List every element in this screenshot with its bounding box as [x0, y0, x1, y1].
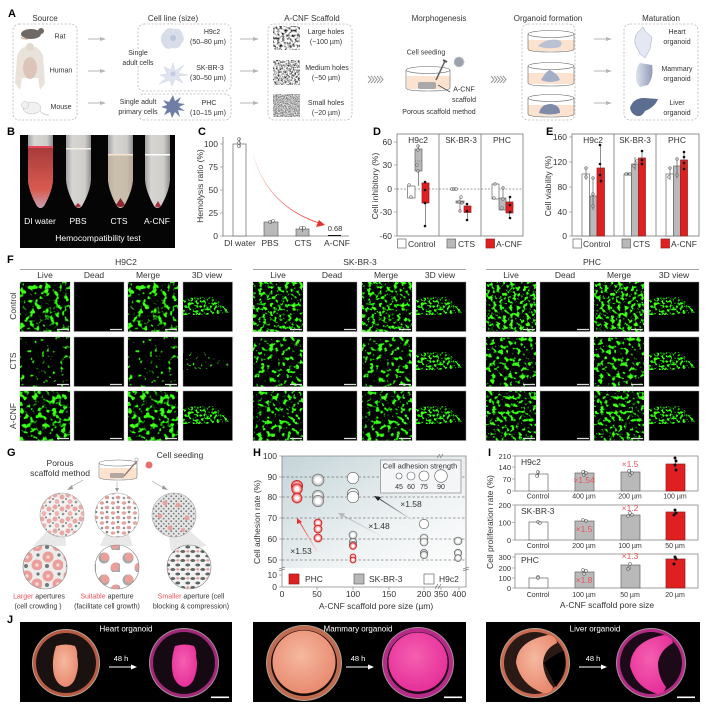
arrows cell line to scaffold: [240, 37, 259, 105]
scaffold box with holes blocks: (~50 µm): [312, 75, 340, 82]
G labels: Porous: [47, 458, 73, 468]
panel D: cell inhibitory box plot: [370, 134, 523, 249]
panel E: cell viability bar chart: 120: [553, 157, 567, 167]
x labels: A-CNF: [324, 238, 350, 248]
scaffold box with holes blocks: [268, 24, 352, 120]
column headers: Dead: [322, 270, 342, 280]
3D view green slabs: [183, 297, 698, 424]
panel C: hemolysis bar chart: [195, 137, 350, 248]
red bubbles PHC: [291, 480, 356, 563]
morphogenesis dish: Porous scaffold method: [402, 109, 476, 116]
legend: [573, 239, 697, 249]
chart: H9c2: 70: [503, 475, 511, 484]
legend: CTS: [633, 239, 650, 249]
column headers: Merge: [374, 270, 398, 280]
column headers: Dead: [84, 270, 104, 280]
tube: DI water: [28, 135, 53, 208]
x ticks labels: 100: [346, 589, 360, 599]
aperture captions: blocking & compression): [153, 604, 229, 610]
x labels: CTS: [294, 238, 312, 248]
column headings: Morphogenesis: [412, 14, 466, 23]
axis titles: [252, 480, 433, 611]
x ticks labels: 350: [434, 589, 448, 599]
cell line labels: [190, 29, 226, 117]
down arrows: [67, 480, 168, 492]
bubble legend: PHC: [305, 574, 323, 584]
pink cell spots in the dense scaffold: [158, 500, 190, 532]
group titles: SK-BR-3: [445, 136, 477, 145]
arrows source to cell line: [88, 37, 106, 105]
chart: SK-BR-3: [498, 501, 698, 550]
black arrow: [374, 496, 412, 520]
axis titles: A-CNF scaffold pore size (µm): [319, 601, 433, 611]
chart: H9c2: 0: [507, 487, 511, 496]
row labels: CTS: [8, 352, 18, 370]
seeding dish: [99, 458, 152, 480]
column headers: [37, 270, 690, 280]
group titles: H9c2: [583, 135, 603, 145]
axis breaks: [279, 454, 469, 589]
tube labels: PBS: [69, 216, 87, 226]
bubble legend: [289, 574, 459, 584]
chart: H9c2: [498, 452, 698, 500]
chart: H9c2: Control: [527, 494, 550, 500]
morphogenesis dish: A-CNF: [453, 86, 475, 94]
chart: PHC: ×1.8: [576, 575, 593, 585]
red arrow: [297, 518, 318, 553]
panel D: cell inhibitory box plot: 60: [383, 137, 392, 147]
column headers: 3D view: [659, 270, 690, 280]
group titles: SK-BR-3: [619, 136, 651, 145]
chart: SK-BR-3: 100: [498, 518, 511, 528]
icon: PHC cell: [161, 95, 185, 118]
cell line box: Single adult: [120, 99, 156, 106]
panel C: hemolysis bar chart: 50: [209, 185, 218, 195]
x ticks labels: 0: [280, 589, 285, 599]
panel D: cell inhibitory box plot: -60: [380, 231, 392, 241]
multipliers: [290, 499, 422, 556]
scaffold box with holes blocks: Large holes: [308, 29, 345, 36]
panel A: workflow schematic: [8, 8, 698, 120]
adhesion strength legend: 90: [437, 484, 445, 491]
column headers: Dead: [555, 270, 575, 280]
panel E: cell viability bar chart: 80: [558, 182, 567, 192]
panel E: cell viability bar chart: [543, 132, 699, 249]
chart: PHC: 300: [498, 553, 511, 562]
multipliers: ×1.53: [290, 546, 312, 556]
source dashed box: Mouse: [50, 104, 72, 111]
source dashed box: [13, 24, 77, 120]
panel label A: A: [8, 8, 16, 20]
aperture circles zoomed: [23, 545, 211, 589]
panel E: cell viability bar chart: 0: [562, 231, 567, 241]
row labels: Control: [8, 292, 18, 320]
tube labels: A-CNF: [144, 216, 170, 226]
column headings: Source: [32, 14, 58, 23]
chevrons 2: [491, 76, 506, 83]
multipliers: ×1.48: [368, 521, 390, 531]
chart: H9c2: 400 µm: [572, 494, 596, 500]
panel label D: D: [373, 126, 381, 138]
legend: [398, 239, 522, 249]
panel C: hemolysis bar chart: 100: [204, 139, 218, 149]
x ticks labels: 400: [452, 589, 466, 599]
G labels: [30, 450, 204, 478]
box groups: [408, 145, 513, 227]
column headings: Cell line (size): [148, 14, 198, 23]
cell line box: adult cells: [122, 60, 154, 67]
panel H: adhesion bubble chart: [252, 451, 469, 611]
tube labels: Hemocompatibility test: [55, 233, 141, 243]
chart: H9c2: 140: [498, 463, 511, 472]
group headers: [20, 257, 699, 270]
chart: PHC: PHC: [521, 555, 539, 565]
chart: SK-BR-3: SK-BR-3: [521, 506, 555, 516]
group headers: PHC: [583, 257, 601, 267]
y title: Cell proliferation rate (%): [485, 475, 495, 569]
red trend arrow: [252, 150, 325, 227]
aperture captions: (cell crowding ): [14, 604, 62, 610]
G labels: scaffold method: [30, 468, 90, 478]
organoid formation box with dishes: [522, 24, 575, 120]
maturation box: Heart: [668, 29, 686, 36]
chart: H9c2: 210: [498, 452, 511, 461]
column headers: Live: [37, 270, 53, 280]
bubble legend: H9c2: [439, 574, 459, 584]
maturation box: organoid: [663, 76, 691, 83]
icon: SK-BR-3 cell: [159, 63, 188, 86]
chart: H9c2: H9c2: [521, 457, 541, 467]
photo: mammary organoid: 48 h: [351, 654, 365, 663]
aperture captions: Suitable aperture: [80, 594, 134, 600]
cell line labels: PHC: [202, 100, 216, 107]
gray arrow: [338, 513, 385, 538]
chart: SK-BR-3: 100 µm: [618, 543, 642, 550]
y ticks labels: 70: [268, 513, 277, 523]
adhesion strength legend: 60: [407, 484, 415, 491]
tube labels: CTS: [110, 216, 128, 226]
cell line labels: (50–80 µm): [190, 39, 226, 46]
panel label J: J: [7, 614, 13, 626]
tube: CTS: [108, 135, 133, 208]
legend: Control: [408, 239, 436, 249]
column headings: Organoid formation: [514, 14, 582, 23]
panel D: cell inhibitory box plot: 0: [387, 184, 392, 194]
photo: heart organoid: 48 h: [114, 654, 128, 663]
x ticks labels: 200: [417, 589, 431, 599]
bubble legend: SK-BR-3: [369, 574, 403, 584]
scaffold box with holes blocks: (~20 µm): [312, 110, 340, 117]
chart: SK-BR-3: ×1.2: [622, 503, 639, 513]
photo: liver organoid: Liver organoid: [570, 624, 620, 634]
chart: PHC: 50 µm: [620, 592, 640, 599]
chart: PHC: ×1.3: [622, 551, 639, 561]
cell line labels: (10–15 µm): [190, 110, 226, 117]
black image frames: [20, 282, 699, 440]
legend: CTS: [458, 239, 475, 249]
panel D: cell inhibitory box plot: 30: [383, 160, 392, 170]
morphogenesis dish: scaffold: [452, 97, 476, 104]
group titles: [583, 135, 686, 145]
tube: A-CNF: [145, 135, 170, 208]
column headers: Live: [270, 270, 286, 280]
x ticks labels: 50: [312, 589, 322, 599]
column headers: 3D view: [425, 270, 456, 280]
row labels: A-CNF: [8, 403, 18, 429]
cell line labels: (30–50 µm): [190, 75, 226, 82]
chart: SK-BR-3: ×1.5: [576, 524, 593, 534]
panel label B: B: [7, 126, 15, 138]
panel label H: H: [253, 447, 261, 459]
adhesion strength legend: [380, 460, 461, 493]
G labels: Cell seeding: [157, 450, 204, 460]
aperture captions: Smaller aperture (cell: [158, 594, 225, 600]
x title: A-CNF scaffold pore size: [560, 600, 654, 610]
panel I: proliferation bar charts: [485, 452, 698, 610]
chart: PHC: [498, 551, 698, 599]
column headings: Maturation: [642, 14, 680, 23]
column headers: Merge: [136, 270, 160, 280]
chart: H9c2: 100 µm: [663, 494, 687, 500]
y ticks labels: 0: [272, 582, 277, 592]
y ticks labels: 80: [268, 492, 277, 502]
tube labels: [24, 216, 170, 243]
panel E: cell viability bar chart: 40: [558, 207, 567, 217]
green fluorescence live and merge images: [20, 282, 644, 440]
cell line box: primary cells: [118, 109, 158, 116]
photo: heart organoid: [20, 622, 232, 702]
panel label C: C: [198, 126, 206, 138]
chart: PHC: 200: [498, 564, 511, 573]
legend: A-CNF: [671, 239, 697, 249]
cell line box: [112, 24, 231, 120]
y ticks labels: [263, 451, 277, 592]
panel label E: E: [546, 126, 553, 138]
axis titles: Cell adhesion rate (%): [252, 480, 262, 564]
photo: liver organoid: [486, 622, 700, 702]
aperture captions: (facilitate cell growth): [74, 604, 140, 610]
source dashed box: Rat: [55, 34, 65, 40]
aperture circles top: [40, 493, 196, 537]
maturation box: Mammary: [661, 66, 693, 73]
group titles: PHC: [493, 135, 511, 145]
group headers: SK-BR-3: [343, 257, 377, 267]
x labels: [224, 238, 350, 248]
chart: PHC: 20 µm: [665, 592, 685, 599]
cell line labels: SK-BR-3: [196, 65, 224, 72]
column headers: 3D view: [192, 270, 223, 280]
aperture captions: Larger apertures: [13, 594, 65, 600]
group headers: H9C2: [115, 257, 137, 267]
chart: H9c2: 200 µm: [618, 494, 642, 500]
adhesion strength legend: Cell adhesion strength: [383, 462, 457, 470]
group titles: H9c2: [408, 135, 428, 145]
value label: 0.68: [328, 224, 342, 233]
panel label G: G: [7, 447, 16, 459]
column headers: Merge: [607, 270, 631, 280]
chart: PHC: 0: [507, 584, 511, 593]
panel label I: I: [488, 447, 491, 459]
icon: H9c2 cell: [161, 28, 184, 49]
chart: PHC: Control: [527, 592, 550, 599]
morphogenesis dish: Cell seeding: [407, 50, 445, 56]
panel D: cell inhibitory box plot: -30: [380, 207, 392, 217]
cell line box: Single: [128, 50, 148, 57]
photo: mammary organoid: [253, 622, 466, 702]
x ticks labels: [280, 589, 466, 599]
aperture captions: [13, 594, 229, 610]
multipliers: ×1.58: [400, 499, 422, 509]
chart: PHC: 100: [498, 574, 511, 583]
chart: SK-BR-3: Control: [527, 543, 550, 550]
y ticks labels: 50: [268, 555, 277, 565]
source dashed box: Human: [50, 68, 72, 74]
photo: heart organoid: Heart organoid: [100, 624, 152, 634]
x labels: PBS: [261, 238, 279, 248]
group titles: PHC: [668, 135, 686, 145]
y title: Cell inhibitory (%): [370, 153, 380, 219]
scaffold box with holes blocks: Small holes: [308, 100, 345, 107]
white bubbles top: [347, 472, 429, 529]
chart: SK-BR-3: 200: [498, 501, 511, 510]
magnification wedges: [33, 525, 207, 551]
bars: [233, 138, 341, 236]
group titles: [408, 135, 511, 145]
y ticks labels: 10: [268, 570, 277, 580]
chevrons 1: [368, 76, 383, 83]
maturation box: Liver: [669, 100, 685, 107]
panel C: hemolysis bar chart: 0: [213, 231, 218, 241]
y ticks labels: 90: [268, 472, 277, 482]
maturation box: organoid: [663, 39, 691, 46]
panel label F: F: [7, 254, 14, 266]
photo: mammary organoid: Mammary organoid: [324, 624, 392, 634]
chart: SK-BR-3: 200 µm: [572, 543, 596, 550]
legend: A-CNF: [496, 239, 522, 249]
y ticks labels: 60: [268, 534, 277, 544]
panel G: aperture schematic: [13, 450, 229, 610]
scaffold box with holes blocks: Medium holes: [305, 65, 349, 72]
y title: Cell viability (%): [543, 156, 553, 216]
chart: PHC: 100 µm: [572, 592, 596, 599]
legend: Control: [583, 239, 611, 249]
y ticks labels: 100: [263, 451, 277, 461]
gray bubbles SK-BR-3: [312, 474, 428, 559]
column headings: [32, 14, 680, 23]
x ticks labels: 150: [382, 589, 396, 599]
scaffold box with holes blocks: (~100 µm): [310, 39, 342, 46]
cell line labels: H9c2: [204, 29, 220, 36]
adhesion strength legend: 75: [420, 484, 428, 491]
x labels: DI water: [224, 238, 256, 248]
tube: PBS: [66, 135, 91, 208]
column headers: Live: [503, 270, 519, 280]
chart: H9c2: ×1.5: [622, 459, 639, 469]
panel C: hemolysis bar chart: 25: [209, 208, 218, 218]
chart: H9c2: ×1.54: [573, 475, 595, 485]
morphogenesis dish: [402, 50, 476, 116]
arrows to maturation: [594, 37, 612, 105]
panel B: hemocompatibility photo: [20, 135, 175, 248]
y axis title: Hemolysis ratio (%): [195, 149, 205, 223]
panel F: live dead microscopy grid: [8, 257, 699, 440]
bars: [582, 144, 688, 236]
tube labels: DI water: [24, 216, 56, 226]
panel E: cell viability bar chart: 160: [553, 132, 567, 142]
column headings: A-CNF Scaffold: [284, 14, 340, 23]
maturation box: organoid: [663, 110, 691, 117]
panel C: hemolysis bar chart: 75: [209, 162, 218, 172]
row labels: [8, 292, 18, 429]
adhesion strength legend: 45: [395, 484, 403, 491]
photo: liver organoid: 48 h: [586, 654, 600, 663]
maturation box: [624, 24, 698, 120]
white bubbles H9c2: [454, 537, 462, 561]
chart: SK-BR-3: 50 µm: [665, 543, 685, 550]
scale bars: [57, 330, 643, 438]
chart: SK-BR-3: 0: [507, 536, 511, 545]
